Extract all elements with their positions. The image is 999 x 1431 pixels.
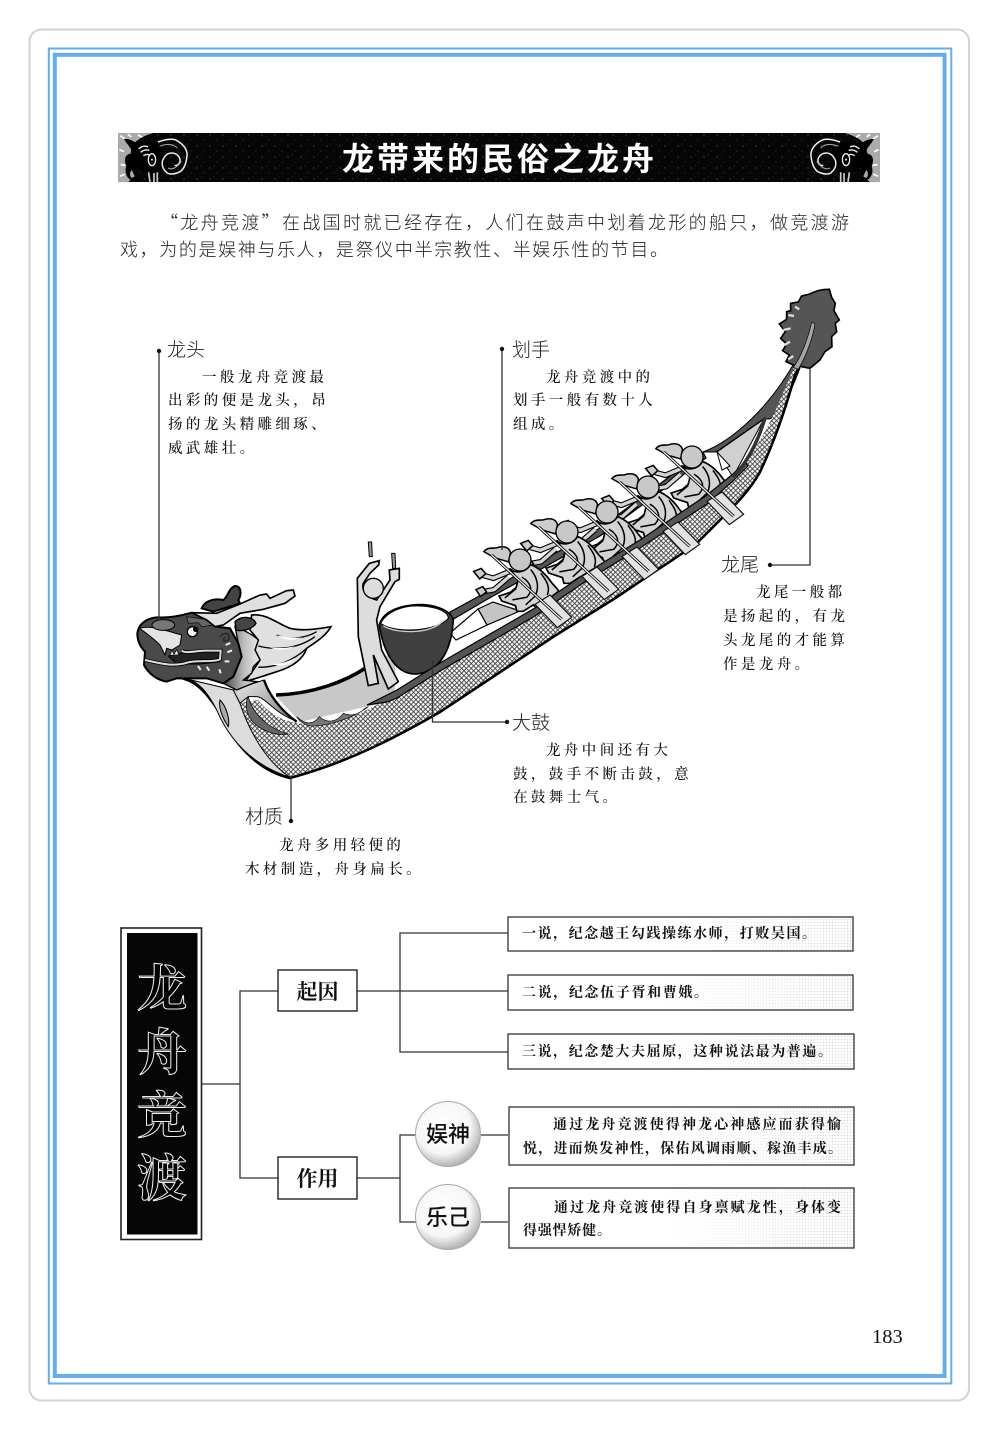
text box: third theory — [508, 1034, 854, 1069]
callout: material — [245, 777, 424, 878]
callout: dragon head: 龙头 — [167, 339, 205, 361]
text box: entertain the gods explanation: 悦，进而焕发神性，保佑风调雨顺、稼渔丰成。 — [523, 1140, 842, 1157]
callout: dragon tail: 龙尾 — [721, 554, 759, 576]
node: entertain oneself: 乐己 — [426, 1205, 470, 1230]
neck mane — [223, 627, 260, 690]
icon: left ornament — [118, 133, 187, 182]
text box: entertain the gods explanation — [509, 1107, 854, 1165]
text box: third theory: 三说，纪念楚大夫屈原，这种说法最为普遍。 — [522, 1043, 832, 1060]
oars — [492, 452, 744, 628]
callout: big drum: 大鼓 — [512, 712, 550, 734]
callout: dragon head: 扬的龙头精雕细琢、 — [168, 415, 329, 433]
page number: 183 — [872, 1326, 903, 1348]
tree diagram connectors — [202, 933, 508, 1222]
snout — [139, 627, 182, 655]
dragon head — [137, 586, 331, 690]
drummer — [357, 561, 399, 689]
mouth — [168, 649, 222, 664]
node: function — [278, 1157, 357, 1199]
text box: second theory: 二说，纪念伍子胥和曹娥。 — [522, 984, 708, 1001]
node: function: 作用 — [296, 1167, 338, 1191]
callout: rowers: 龙舟竞渡中的 — [546, 368, 653, 386]
node: cause — [278, 970, 357, 1011]
text box: first theory — [508, 917, 853, 951]
panel: dragon boat race title: 渡 — [137, 1151, 187, 1207]
panel: dragon boat race title: 舟 — [137, 1025, 187, 1081]
panel: dragon boat race title: 龙 — [137, 961, 187, 1017]
intro paragraph — [120, 209, 849, 262]
callout: dragon head: 一般龙舟竞渡最 — [202, 368, 327, 386]
callout: dragon head: 威武雄壮。 — [168, 439, 258, 457]
dragon tail leaf — [779, 289, 839, 369]
node: entertain the gods — [416, 1102, 480, 1166]
rowers — [474, 444, 731, 611]
callout: dragon tail: 作是龙舟。 — [723, 656, 812, 673]
intro paragraph: 戏，为的是娱神与乐人，是祭仪中半宗教性、半娱乐性的节目。 — [120, 236, 668, 262]
node: entertain oneself — [416, 1184, 480, 1250]
drum — [379, 605, 453, 674]
callout: rowers: 划手一般有数十人 — [513, 391, 656, 409]
text box: entertain the gods explanation: 通过龙舟竞渡使得神龙心神感应而获得愉 — [553, 1116, 841, 1133]
panel: dragon boat race title — [121, 928, 202, 1240]
text box: second theory — [508, 975, 853, 1010]
mane flames — [245, 615, 331, 682]
callout: material: 龙舟多用轻便的 — [279, 837, 404, 854]
node: cause: 起因 — [296, 980, 338, 1004]
callout: dragon tail — [721, 368, 848, 673]
icon: drum sticks — [368, 542, 396, 568]
icon: right ornament — [811, 133, 880, 182]
callout: material: 材质 — [245, 806, 283, 828]
callout: rowers — [500, 339, 656, 550]
title banner — [118, 133, 880, 182]
text box: entertain oneself explanation: 得强悍矫健。 — [523, 1222, 611, 1239]
title: 龙带来的民俗之龙舟 — [342, 141, 654, 177]
text box: entertain oneself explanation: 通过龙舟竞渡使得自身禀赋龙性，身体变 — [554, 1199, 842, 1216]
drummer and drum — [357, 542, 453, 689]
hull — [177, 322, 814, 778]
callout: big drum — [432, 660, 692, 806]
callout: rowers: 划手 — [512, 339, 550, 361]
head mass — [137, 613, 242, 683]
callout: big drum: 鼓，鼓手不断击鼓，意 — [513, 765, 692, 783]
callout: dragon head — [157, 339, 329, 620]
callout: big drum: 龙舟中间还有大 — [546, 741, 671, 759]
node: entertain the gods: 娱神 — [426, 1122, 470, 1147]
boat interior and far rail — [275, 365, 800, 722]
text box: entertain oneself explanation — [509, 1188, 854, 1248]
scales — [198, 643, 232, 673]
callout: big drum: 在鼓舞士气。 — [513, 788, 620, 806]
antler — [192, 590, 295, 627]
intro paragraph: “龙舟竞渡”在战国时就已经存在，人们在鼓声中划着龙形的船只，做竞渡游 — [160, 209, 849, 235]
callout: dragon tail: 头龙尾的才能算 — [723, 631, 848, 649]
callout: rowers: 组成。 — [513, 416, 567, 433]
callout: material: 木材制造，舟身扁长。 — [245, 860, 424, 878]
crest — [202, 586, 241, 612]
callout: dragon tail: 龙尾一般都 — [756, 584, 846, 601]
eye — [187, 627, 197, 637]
text box: first theory: 一说，纪念越王勾践操练水师，打败吴国。 — [522, 925, 816, 942]
illustration: dragon boat — [137, 289, 839, 778]
panel: dragon boat race title: 竞 — [137, 1088, 187, 1144]
callout: dragon tail: 是扬起的，有龙 — [723, 607, 848, 625]
callout: dragon head: 出彩的便是龙头，昂 — [168, 392, 329, 409]
bow details — [177, 677, 368, 777]
